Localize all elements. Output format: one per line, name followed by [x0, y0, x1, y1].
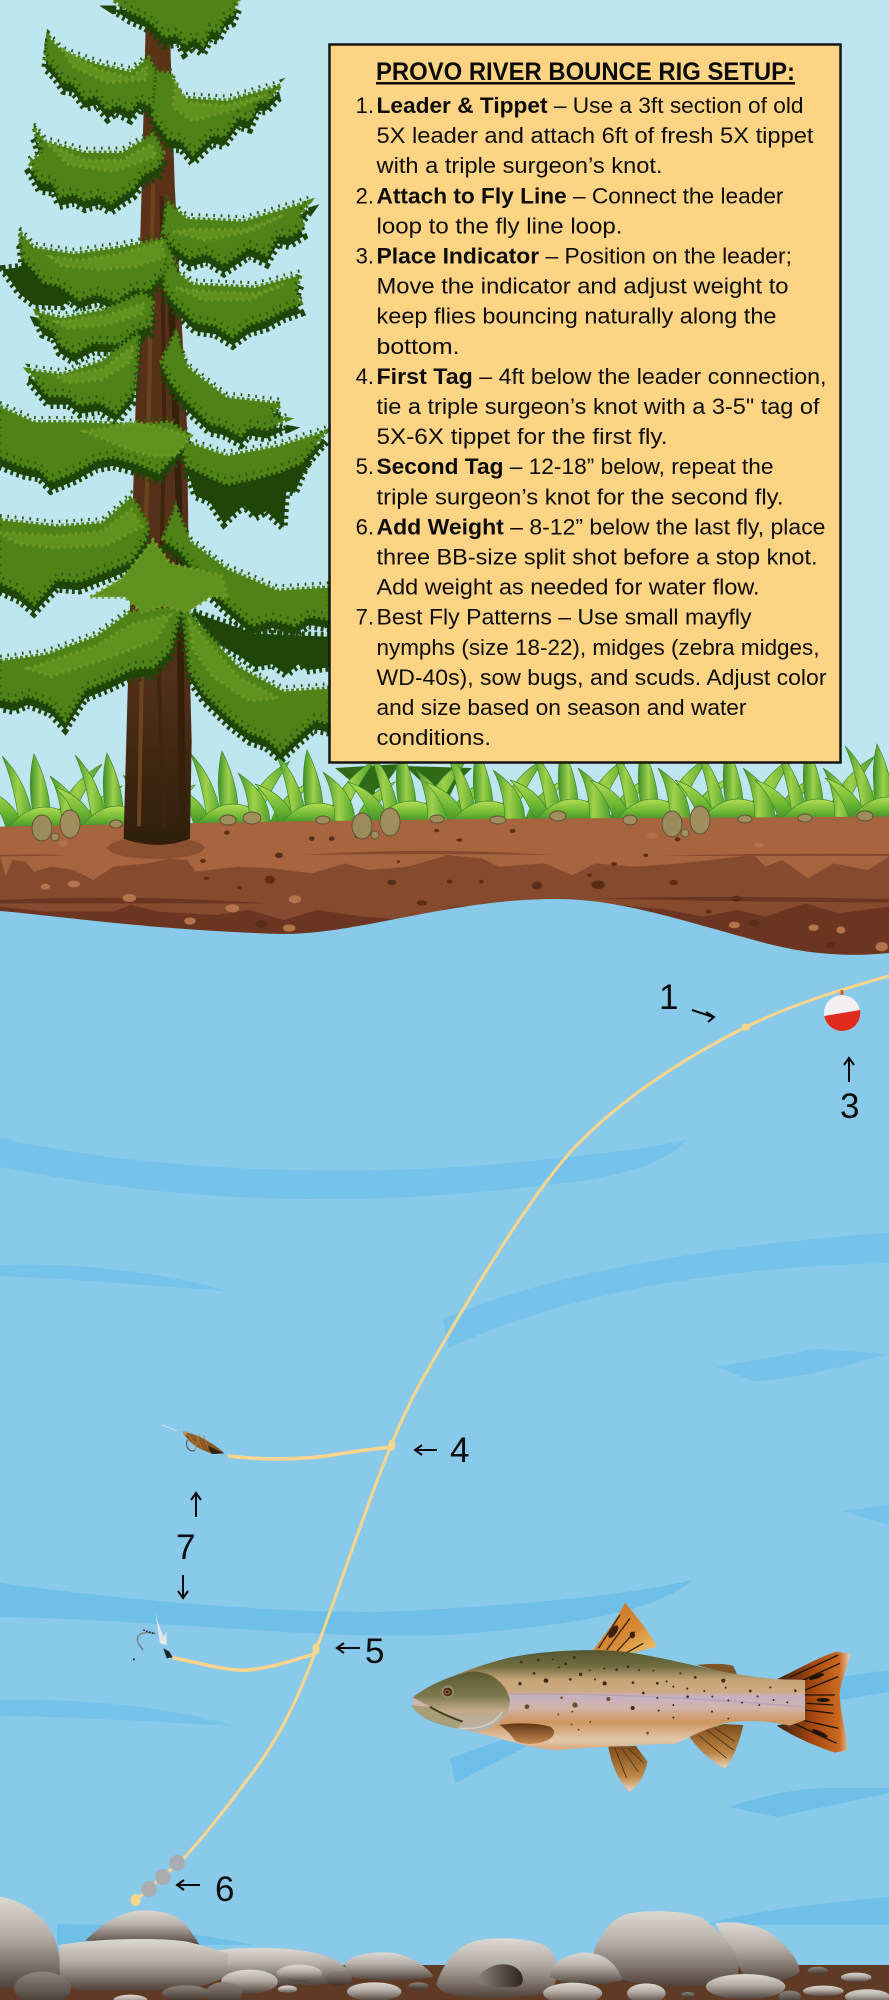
- step text: tie a triple surgeon’s knot with a 3-5" tag of: [376, 394, 820, 419]
- second fly tag: [174, 1654, 314, 1670]
- step text: Add Weight – 8-12” below the last fly, place: [376, 514, 826, 539]
- panel heading: PROVO RIVER BOUNCE RIG SETUP:: [376, 58, 795, 86]
- tree: shaded needle streaks: [0, 0, 329, 745]
- step text: Leader & Tippet – Use a 3ft section of old: [376, 93, 804, 118]
- step text: WD-40s), sow bugs, and scuds. Adjust color: [376, 665, 826, 690]
- step text: Add weight as needed for water flow.: [376, 575, 760, 600]
- brown trout: [411, 1603, 851, 1792]
- tree: trunk: [124, 0, 192, 845]
- dorsal fin: [593, 1603, 657, 1653]
- body: [413, 1650, 805, 1750]
- instructions panel: [330, 44, 840, 762]
- strike indicator bobber: [824, 990, 860, 1031]
- grass along the river bank: [0, 744, 889, 828]
- step text: Place Indicator – Position on the leader;: [376, 244, 792, 268]
- step text: [375, 93, 826, 750]
- ventral fin: [608, 1746, 647, 1792]
- callout number 1: 1: [659, 978, 678, 1017]
- step text: Attach to Fly Line – Connect the leader: [376, 183, 784, 208]
- water current streaks: [0, 1138, 889, 1945]
- step text: with a triple surgeon’s knot.: [375, 153, 662, 178]
- callout number 7 with two arrows: 7: [176, 1528, 195, 1567]
- step text: nymphs (size 18-22), midges (zebra midges,: [376, 635, 820, 660]
- step text: Move the indicator and adjust weight to: [376, 274, 788, 299]
- anal fin: [688, 1724, 743, 1768]
- tree: [0, 0, 329, 859]
- step text: 5X leader and attach 6ft of fresh 5X tippet: [376, 123, 814, 148]
- tail fin: [777, 1652, 851, 1753]
- step text: Best Fly Patterns – Use small mayfly: [376, 605, 752, 630]
- arrow to leader connection: [692, 1010, 714, 1022]
- split shot weights: [141, 1855, 185, 1897]
- tree: far dark boughs: [3, 266, 329, 675]
- callout number 3: 3: [840, 1087, 859, 1126]
- callout number 5: [337, 1632, 384, 1671]
- callout number 4: [415, 1431, 469, 1470]
- boulders on the river bed: [0, 1897, 889, 2000]
- step text: 5X-6X tippet for the first fly.: [376, 424, 668, 449]
- fishing rig line: [136, 976, 889, 1900]
- head and gill cover: [411, 1672, 510, 1732]
- callout number 5: 5: [365, 1632, 384, 1671]
- body spots: [518, 1656, 797, 1720]
- step text: and size based on season and water: [376, 695, 746, 720]
- step numbers: 3.: [356, 244, 374, 268]
- step numbers: 4.: [356, 364, 374, 389]
- soil bank layers: [0, 817, 889, 960]
- down arrow to second fly: [178, 1575, 188, 1598]
- tree: mid green boughs: [0, 0, 329, 750]
- callout number 7 with two arrows: [176, 1493, 201, 1598]
- tree: bark streaks: [139, 184, 183, 826]
- main leader and tippet: [136, 976, 889, 1900]
- pebbles on the bank: [32, 806, 873, 841]
- step text: keep flies bouncing naturally along the: [376, 304, 776, 329]
- callout number 3: [840, 1058, 859, 1126]
- adipose fin: [697, 1664, 737, 1675]
- tree: shadow at base: [108, 837, 204, 859]
- step text: conditions.: [376, 725, 491, 750]
- river bed: [0, 1965, 889, 2000]
- arrow to indicator: [844, 1058, 854, 1082]
- first fly: nymph: [162, 1425, 224, 1454]
- step text: Second Tag – 12-18” below, repeat the: [376, 454, 774, 479]
- step numbers: [356, 93, 374, 630]
- panel background: [330, 44, 840, 762]
- step text: triple surgeon’s knot for the second fly.: [376, 484, 784, 509]
- distant small pine trees: [335, 764, 472, 830]
- callout number 6: 6: [215, 1870, 234, 1909]
- first fly tag: [229, 1447, 392, 1459]
- callout number 4: 4: [450, 1431, 469, 1470]
- sky background: [0, 0, 889, 920]
- step numbers: 1.: [356, 93, 374, 118]
- callout number 6: [177, 1870, 234, 1909]
- step text: bottom.: [376, 334, 460, 359]
- eye: [441, 1685, 454, 1698]
- step numbers: 7.: [356, 605, 374, 630]
- step text: three BB-size split shot before a stop knot.: [376, 544, 818, 570]
- arrow to second tag: [337, 1643, 360, 1653]
- river water: [0, 899, 889, 2000]
- tree: light foliage highlights: [0, 49, 284, 701]
- arrow to first tag: [415, 1445, 437, 1455]
- step numbers: 6.: [356, 514, 374, 539]
- step numbers: 5.: [356, 454, 374, 479]
- pectoral fin: [499, 1723, 554, 1744]
- lateral line: [510, 1694, 805, 1707]
- step text: First Tag – 4ft below the leader connection,: [376, 364, 826, 389]
- knots on the line: [130, 1024, 750, 1906]
- up arrow to first fly: [191, 1493, 201, 1517]
- step text: loop to the fly line loop.: [376, 213, 622, 238]
- step numbers: 2.: [356, 183, 374, 208]
- arrow to split shot: [177, 1880, 200, 1890]
- callout number 1: [659, 978, 714, 1022]
- second fly: zebra midge: [133, 1610, 173, 1660]
- tree: dark undersides of boughs: [0, 10, 329, 760]
